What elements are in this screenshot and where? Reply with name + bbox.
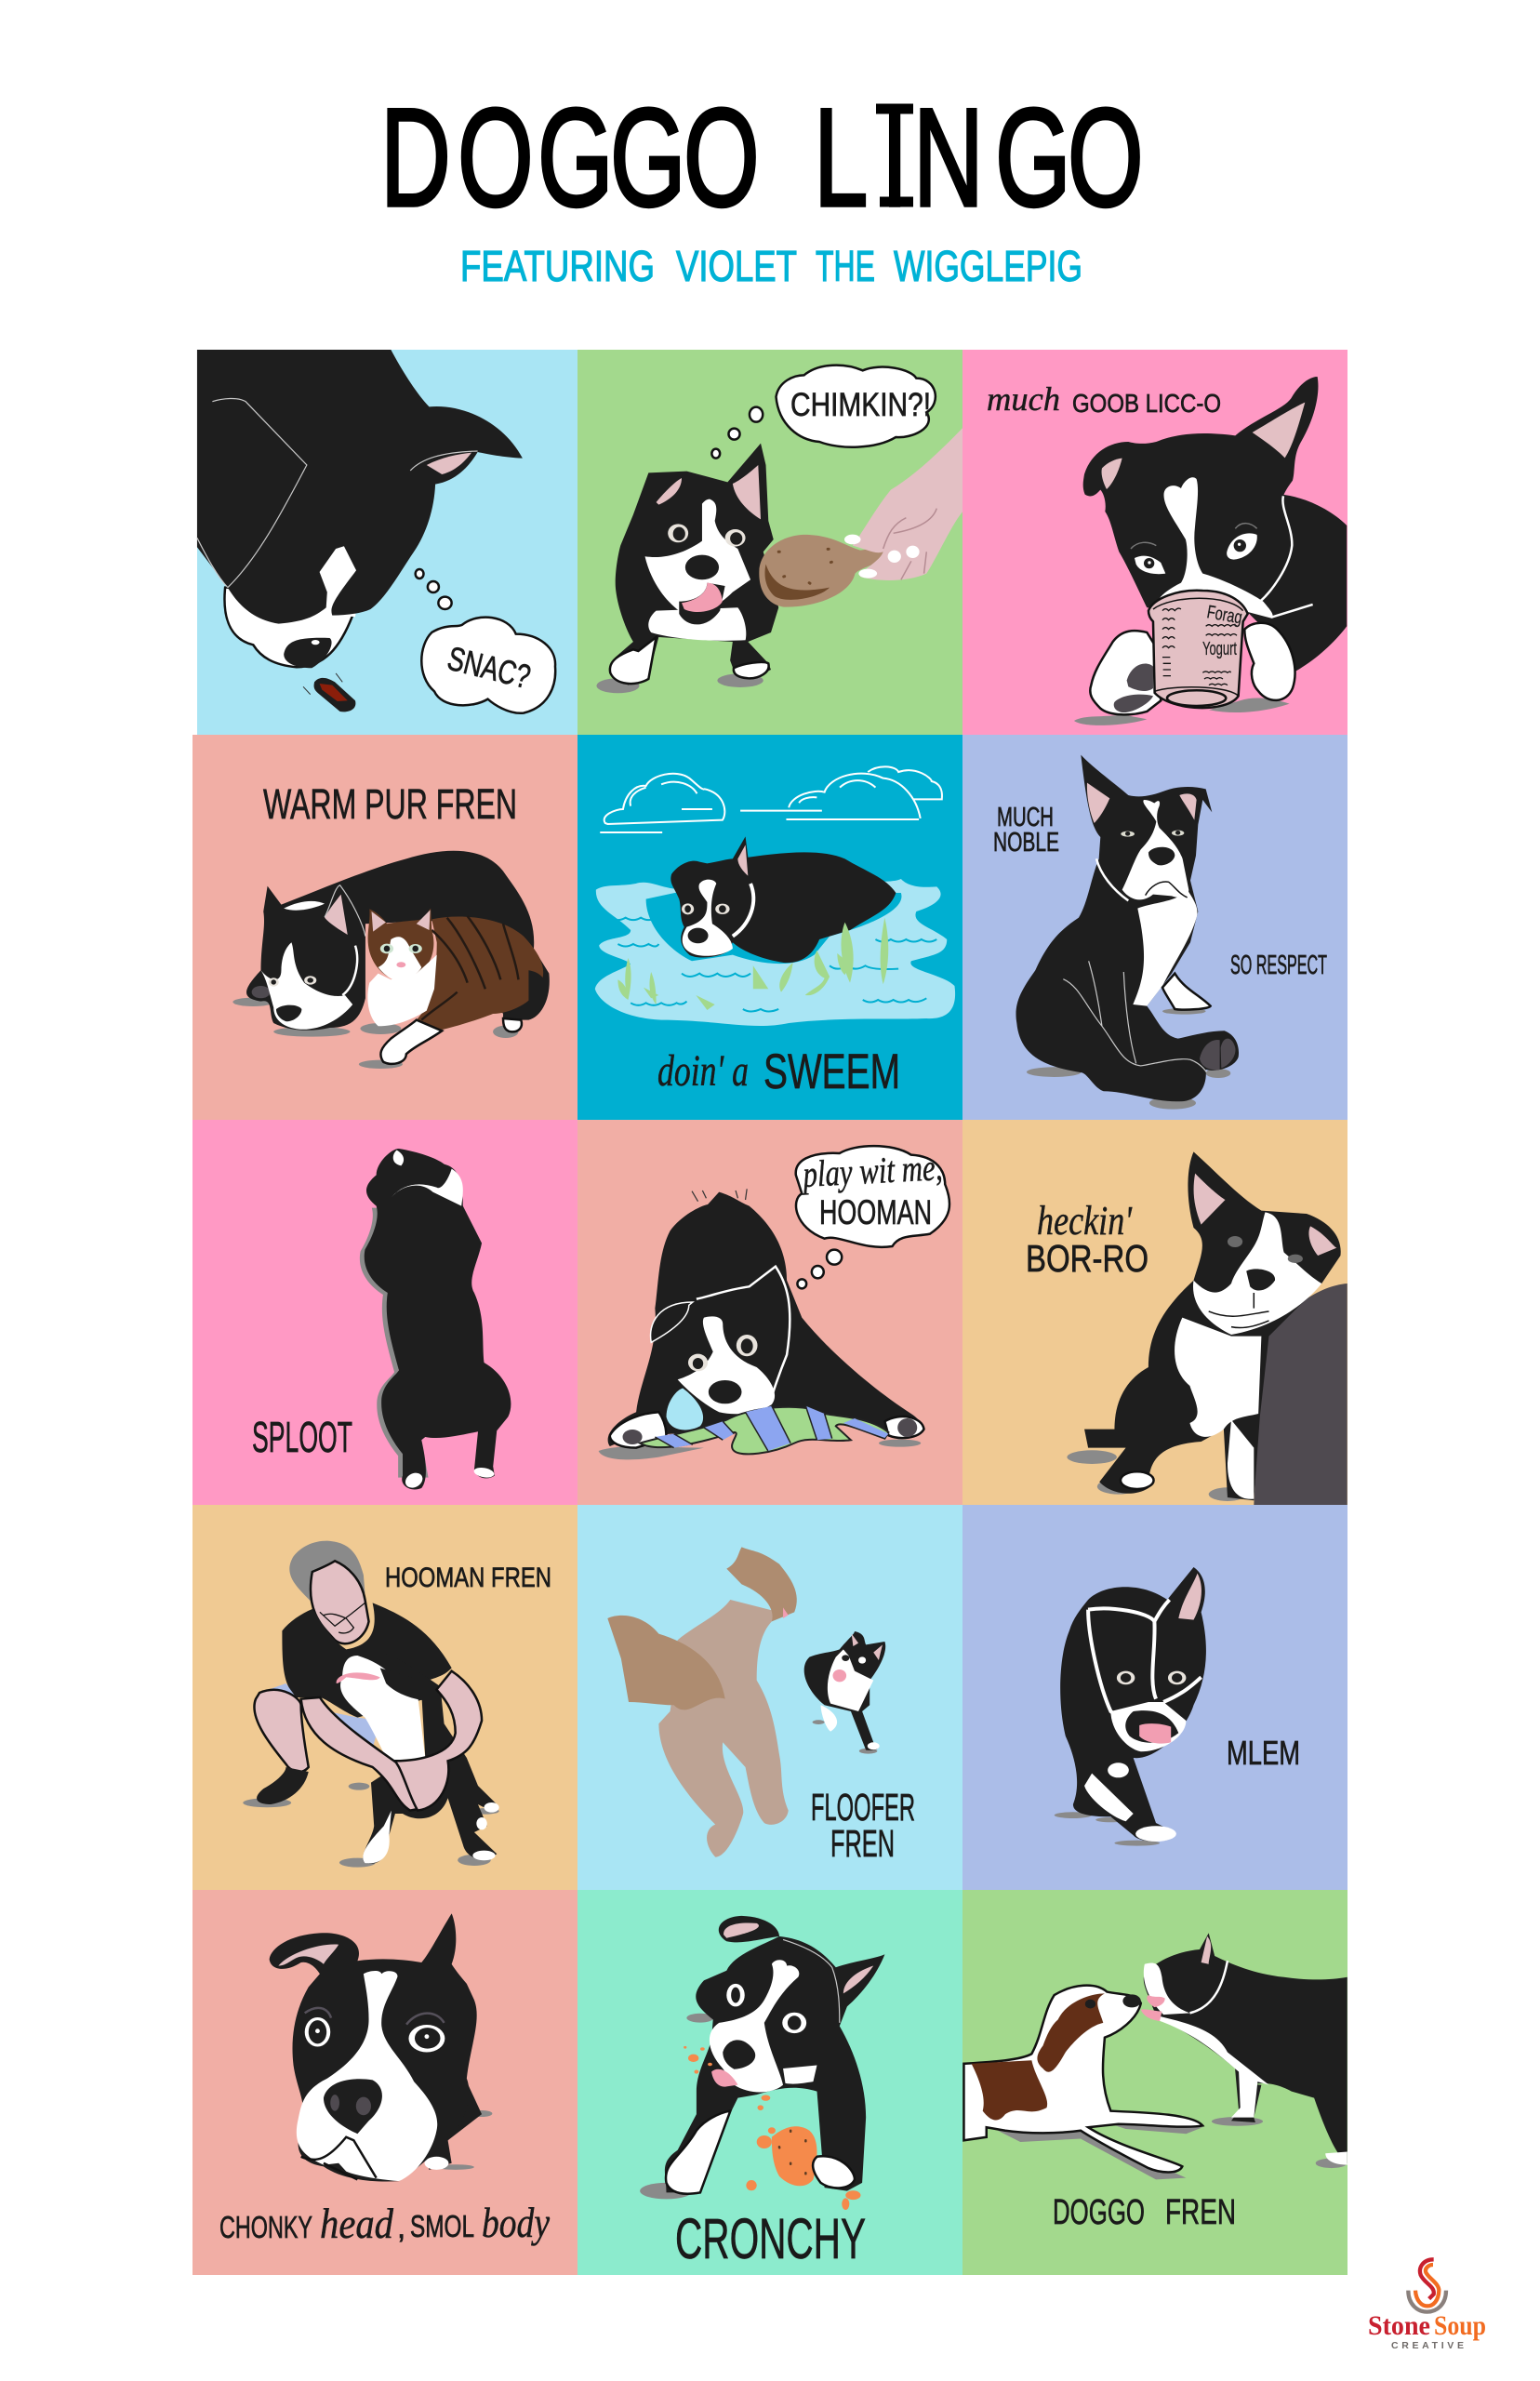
panel: heckin bor-ro — [962, 1120, 1348, 1505]
text: much goob licc-o — [987, 380, 1221, 418]
thought bubbles — [711, 366, 936, 459]
panel: floofer fren — [578, 1505, 962, 1890]
subtitle — [460, 242, 1082, 290]
text: sploot: SPLOOT — [252, 1413, 352, 1461]
striped sock toy — [640, 1406, 888, 1454]
yogurt cup — [1148, 591, 1248, 708]
text: much goob licc-o: GOOB LICC-O — [1072, 389, 1221, 418]
text: much noble: NOBLE — [993, 828, 1059, 858]
panel: sweem — [578, 735, 962, 1120]
big-headed dog — [270, 1913, 492, 2182]
sofa — [1254, 1284, 1348, 1505]
text: yogurt label — [1202, 602, 1243, 659]
panel: cronchy — [578, 1890, 962, 2275]
dog and drumstick — [596, 444, 908, 693]
reeds — [617, 918, 888, 1010]
panel: mlem — [962, 1505, 1348, 1890]
text: much noble: MUCH — [997, 803, 1054, 832]
title: DOGGO — [380, 81, 760, 235]
text: yogurt label: Yogurt — [1202, 639, 1237, 659]
text: floofer fren — [811, 1786, 915, 1865]
panel: hooman fren — [192, 1505, 578, 1890]
title — [380, 81, 1144, 235]
text: chonky head smol body: CHONKY — [219, 2210, 312, 2244]
text: doin a sweem: doin' a — [657, 1046, 749, 1096]
text: chonky head smol body — [219, 2199, 550, 2247]
text: floofer fren: FREN — [830, 1822, 895, 1865]
panel: doggo fren — [962, 1890, 1348, 2275]
text: hooman fren: HOOMAN FREN — [385, 1563, 551, 1593]
thought bubbles — [416, 569, 555, 713]
water — [595, 879, 955, 1026]
text: snac: SNAC? — [444, 639, 535, 696]
man hugging dog — [243, 1541, 499, 1868]
dog and cat — [232, 851, 550, 1069]
text: cronchy: CRONCHY — [675, 2207, 866, 2270]
text: chimkin: CHIMKIN?! — [790, 387, 931, 423]
text: chonky head smol body: head — [320, 2200, 394, 2247]
text: warm pur fren: WARM PUR FREN — [263, 780, 517, 828]
dog swimming — [670, 836, 896, 963]
text: doggo fren: FREN — [1165, 2193, 1236, 2232]
panel: goob licc-o — [962, 350, 1348, 735]
text: chonky head smol body: SMOL — [410, 2209, 474, 2243]
two dogs kissing — [963, 1933, 1348, 2179]
text: much noble — [993, 803, 1059, 858]
title: LINGO — [814, 81, 1144, 235]
panel: much noble — [962, 735, 1348, 1120]
panel: chimkin — [578, 350, 962, 735]
subtitle: VIOLET — [676, 242, 797, 290]
text: heckin bor-ro: BOR-RO — [1026, 1237, 1148, 1280]
floofy dog — [607, 1547, 797, 1857]
text: yogurt label: Forag — [1205, 602, 1243, 629]
panel: warm pur fren — [192, 735, 578, 1120]
dog looking at snack — [197, 350, 523, 668]
panel: snac — [197, 350, 578, 735]
text: chonky head smol body: , — [397, 2210, 405, 2244]
snack — [303, 673, 355, 712]
text: doin a sweem — [657, 1044, 900, 1099]
dog licking nose — [1055, 1567, 1206, 1846]
panel: sploot — [192, 1120, 578, 1505]
subtitle: WIGGLEPIG — [894, 242, 1082, 290]
sweet potato — [684, 2046, 860, 2210]
text: play wit me hooman: HOOMAN — [819, 1193, 932, 1231]
hand — [844, 428, 962, 580]
thought bubbles — [796, 1146, 949, 1288]
panel: play wit me — [578, 1120, 962, 1505]
logo: stone soup creative — [1368, 2259, 1486, 2351]
text: so respect: SO RESPECT — [1230, 951, 1327, 980]
text: heckin bor-ro — [1026, 1198, 1148, 1280]
text: doin a sweem: SWEEM — [763, 1044, 900, 1099]
logo: stone soup creative: Soup — [1434, 2310, 1486, 2341]
text: chonky head smol body: body — [482, 2199, 550, 2246]
clouds — [600, 766, 942, 832]
logo: stone soup creative: Stone — [1368, 2310, 1430, 2341]
small dog — [804, 1631, 885, 1754]
logo: stone soup creative: CREATIVE — [1391, 2340, 1464, 2351]
text: doggo fren: DOGGO — [1053, 2193, 1145, 2232]
dog by sofa — [1067, 1151, 1341, 1501]
panel: chonky head — [192, 1890, 578, 2275]
text: mlem: MLEM — [1227, 1734, 1300, 1772]
text: much goob licc-o: much — [987, 380, 1060, 418]
text: heckin bor-ro: heckin' — [1037, 1198, 1133, 1244]
subtitle: THE — [816, 242, 875, 290]
sitting dog — [1016, 755, 1239, 1110]
subtitle: FEATURING — [460, 242, 655, 290]
playing dog — [599, 1192, 924, 1459]
logo mark — [1408, 2259, 1446, 2312]
text: floofer fren: FLOOFER — [811, 1786, 915, 1829]
text: play wit me hooman — [800, 1146, 943, 1231]
splooting dog — [360, 1149, 511, 1489]
text: play wit me hooman: play wit me, — [800, 1146, 943, 1195]
dog crunching sweet potato — [640, 1916, 884, 2210]
dog with yogurt — [1074, 377, 1347, 725]
